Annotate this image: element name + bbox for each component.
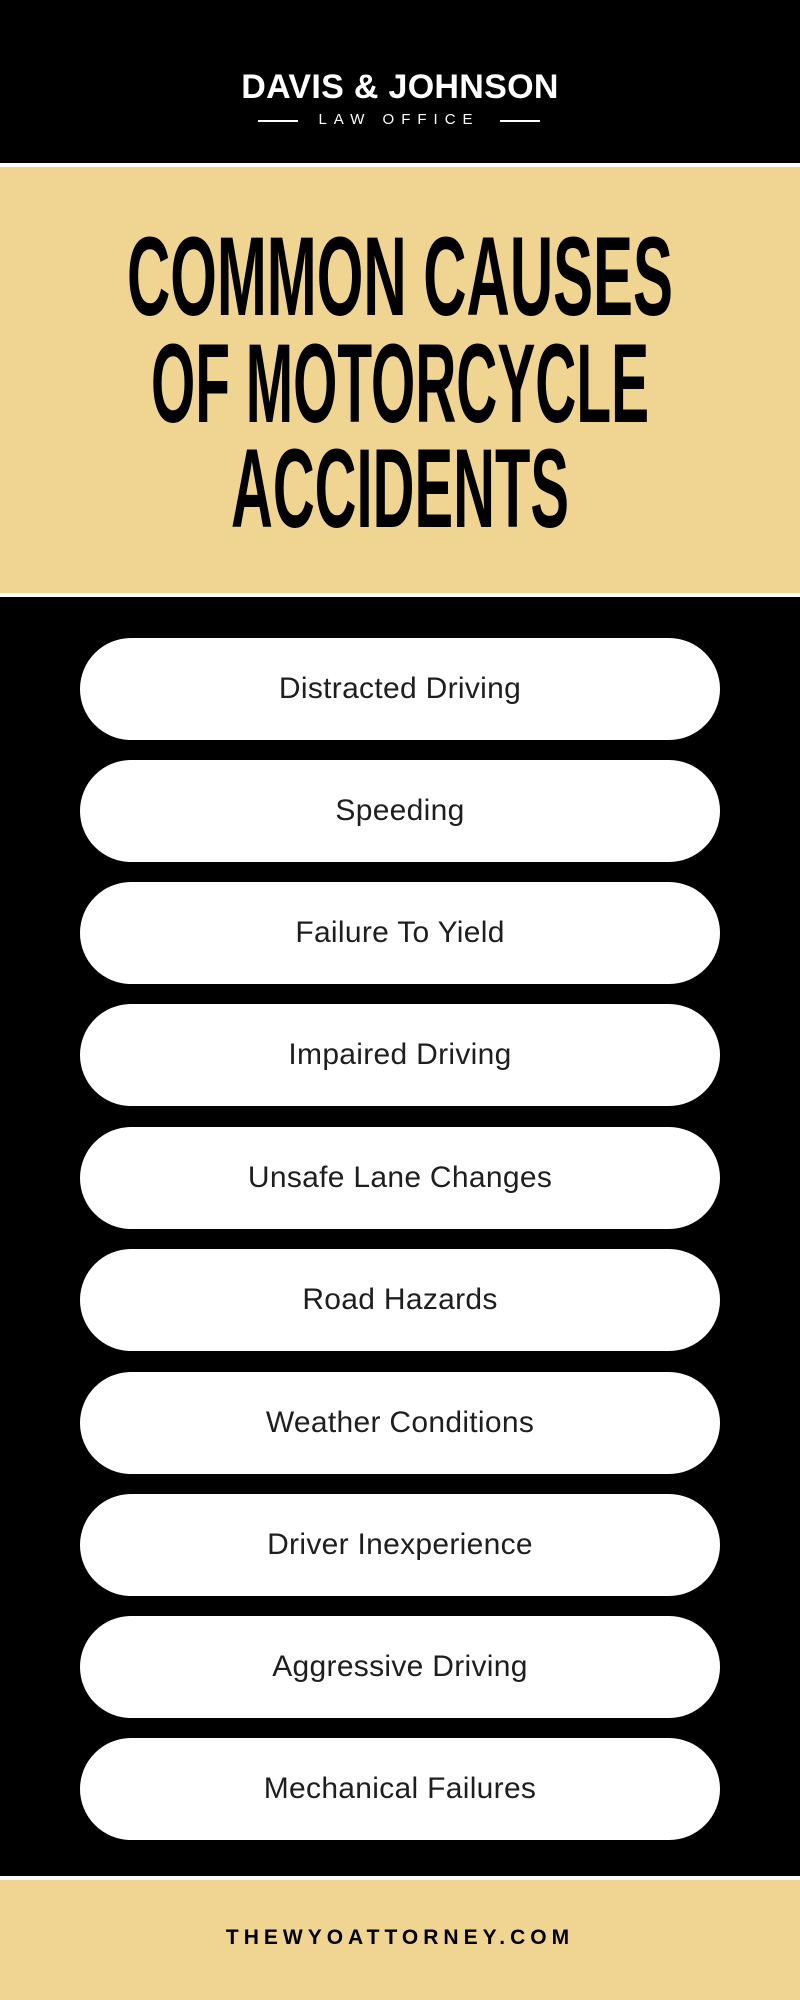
pill: Unsafe Lane Changes: Unsafe Lane Changes: [248, 1161, 552, 1194]
pill: Mechanical Failures: [80, 1738, 720, 1840]
title band: [0, 167, 800, 593]
pill: Distracted Driving: Distracted Driving: [279, 672, 521, 705]
pill: Speeding: Speeding: [335, 794, 465, 827]
pill: Weather Conditions: Weather Conditions: [266, 1406, 534, 1439]
header: logo: [0, 0, 800, 163]
footer url: THEWYOATTORNEY.COM: [226, 1926, 574, 1949]
list of causes: [0, 597, 800, 1876]
logo name: DAVIS & JOHNSON: [241, 68, 559, 106]
pill: Aggressive Driving: Aggressive Driving: [272, 1650, 528, 1683]
pill: Impaired Driving: [80, 1004, 720, 1106]
pill: Failure To Yield: Failure To Yield: [295, 916, 505, 949]
pill: Road Hazards: [80, 1249, 720, 1351]
pill: Driver Inexperience: Driver Inexperience: [267, 1528, 533, 1561]
title: [127, 214, 673, 551]
pill: Weather Conditions: [80, 1372, 720, 1474]
pill: Distracted Driving: [80, 638, 720, 740]
pill: Unsafe Lane Changes: [80, 1127, 720, 1229]
pill: Mechanical Failures: Mechanical Failures: [264, 1772, 536, 1805]
pill: Speeding: [80, 760, 720, 862]
pill: Failure To Yield: [80, 882, 720, 984]
footer: [0, 1880, 800, 2000]
logo subtitle: LAW OFFICE: [318, 111, 480, 128]
pill: Road Hazards: Road Hazards: [302, 1283, 498, 1316]
pill: Impaired Driving: Impaired Driving: [288, 1038, 512, 1071]
pill: Aggressive Driving: [80, 1616, 720, 1718]
pill: Driver Inexperience: [80, 1494, 720, 1596]
